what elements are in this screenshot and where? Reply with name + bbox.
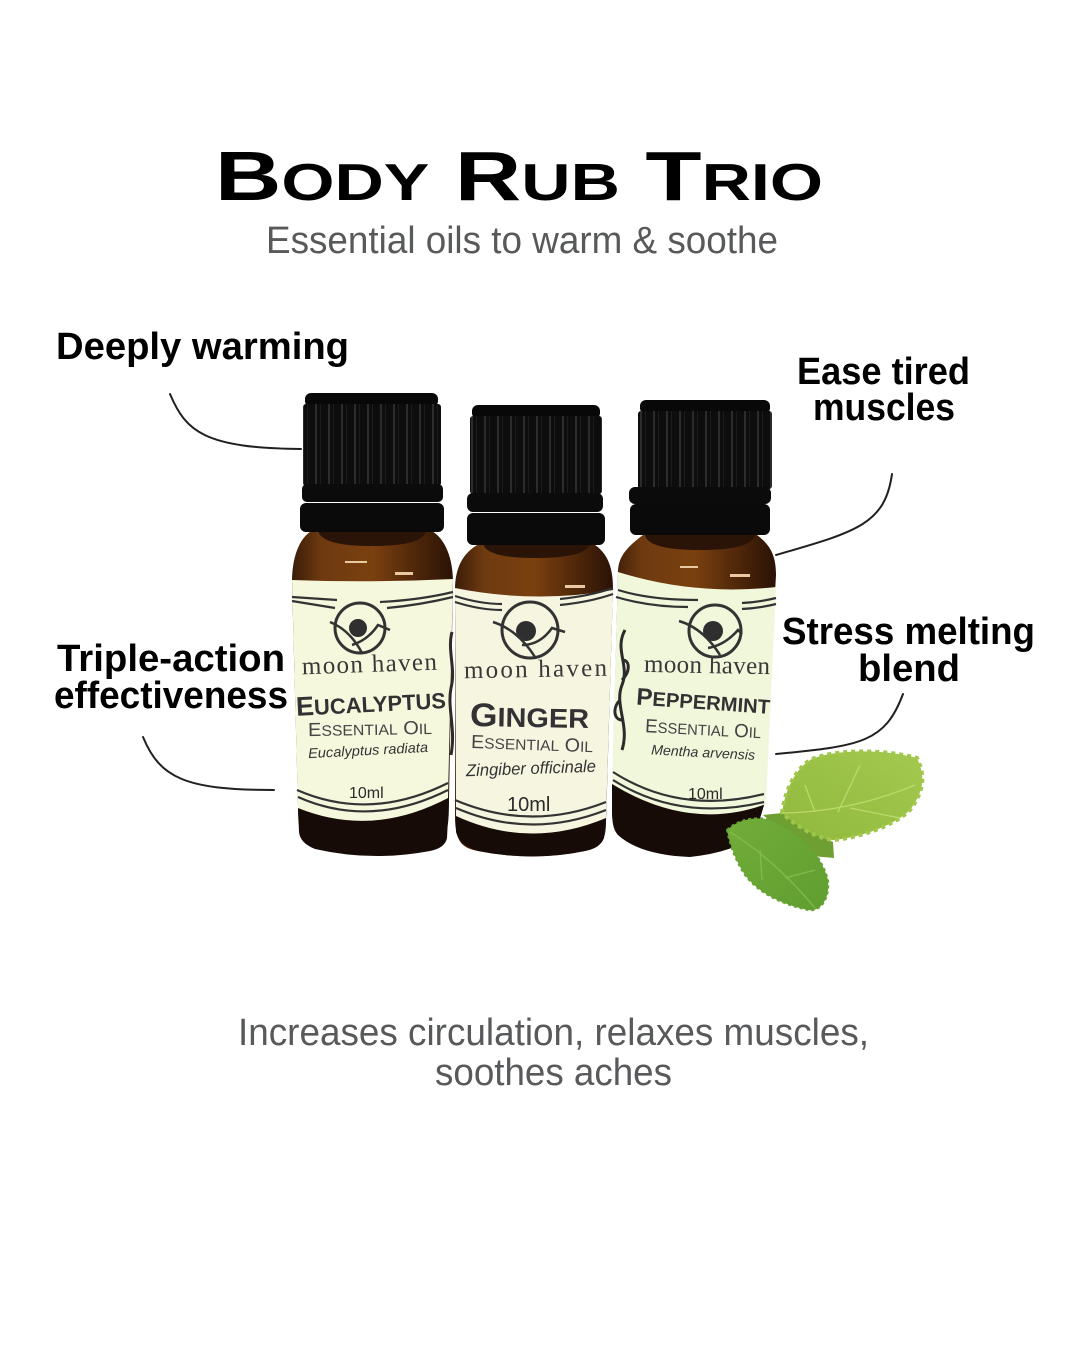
- bottle: eucalyptus: moon haven: [301, 649, 438, 680]
- subtitle: Essential oils to warm & soothe: [266, 220, 778, 262]
- bottle: peppermint: Mentha arvensis: [651, 741, 756, 763]
- bottle: peppermint: moon haven: [644, 651, 771, 680]
- bottle: ginger: 10ml: [507, 794, 550, 816]
- bottle: eucalyptus: 10ml: [349, 785, 384, 802]
- bottle: peppermint: PEPPERMINT: [635, 684, 771, 720]
- bottle: eucalyptus: Eucalyptus radiata: [308, 739, 429, 761]
- label: ease tired muscles: muscles: [813, 387, 955, 429]
- icon: green leaves: [727, 751, 922, 910]
- label: stress melting blend: blend: [858, 648, 960, 690]
- arrow: stress melting blend: [776, 694, 903, 754]
- bottle: peppermint: 10ml: [688, 786, 723, 803]
- label: triple-action effectiveness: Triple-action: [57, 638, 285, 680]
- bottle: eucalyptus: EUCALYPTUS: [295, 684, 447, 722]
- bottle: peppermint: [612, 400, 776, 857]
- label: triple-action effectiveness: [54, 638, 288, 717]
- label: ease tired muscles: Ease tired: [797, 351, 970, 393]
- arrow: deeply warming: [170, 394, 301, 449]
- bottle: ginger: ESSENTIAL OIL: [471, 732, 593, 757]
- benefits text: [238, 1012, 869, 1094]
- bottle: ginger: moon haven: [464, 655, 608, 684]
- benefits text: soothes aches: [435, 1052, 672, 1094]
- ornament on ginger bottle side: [450, 632, 453, 755]
- bottle: peppermint: ESSENTIAL OIL: [645, 716, 762, 743]
- label: stress melting blend: [782, 611, 1035, 690]
- bottle: eucalyptus: ESSENTIAL OIL: [308, 718, 432, 741]
- bottle: eucalyptus: [292, 393, 453, 856]
- bottle: ginger: [455, 405, 613, 856]
- label: deeply warming: Deeply warming: [56, 326, 349, 368]
- benefits text: Increases circulation, relaxes muscles,: [238, 1012, 869, 1054]
- title: B ODY R UB T RIO: [215, 137, 823, 215]
- bottle: ginger: GINGER: [470, 696, 589, 735]
- arrow: triple-action effectiveness: [143, 737, 274, 790]
- arrow: ease tired muscles: [776, 474, 892, 555]
- label: triple-action effectiveness: effectiveness: [54, 675, 288, 717]
- bottle: ginger: Zingiber officinale: [465, 757, 596, 780]
- label: stress melting blend: Stress melting: [782, 611, 1035, 653]
- label: ease tired muscles: [797, 351, 970, 429]
